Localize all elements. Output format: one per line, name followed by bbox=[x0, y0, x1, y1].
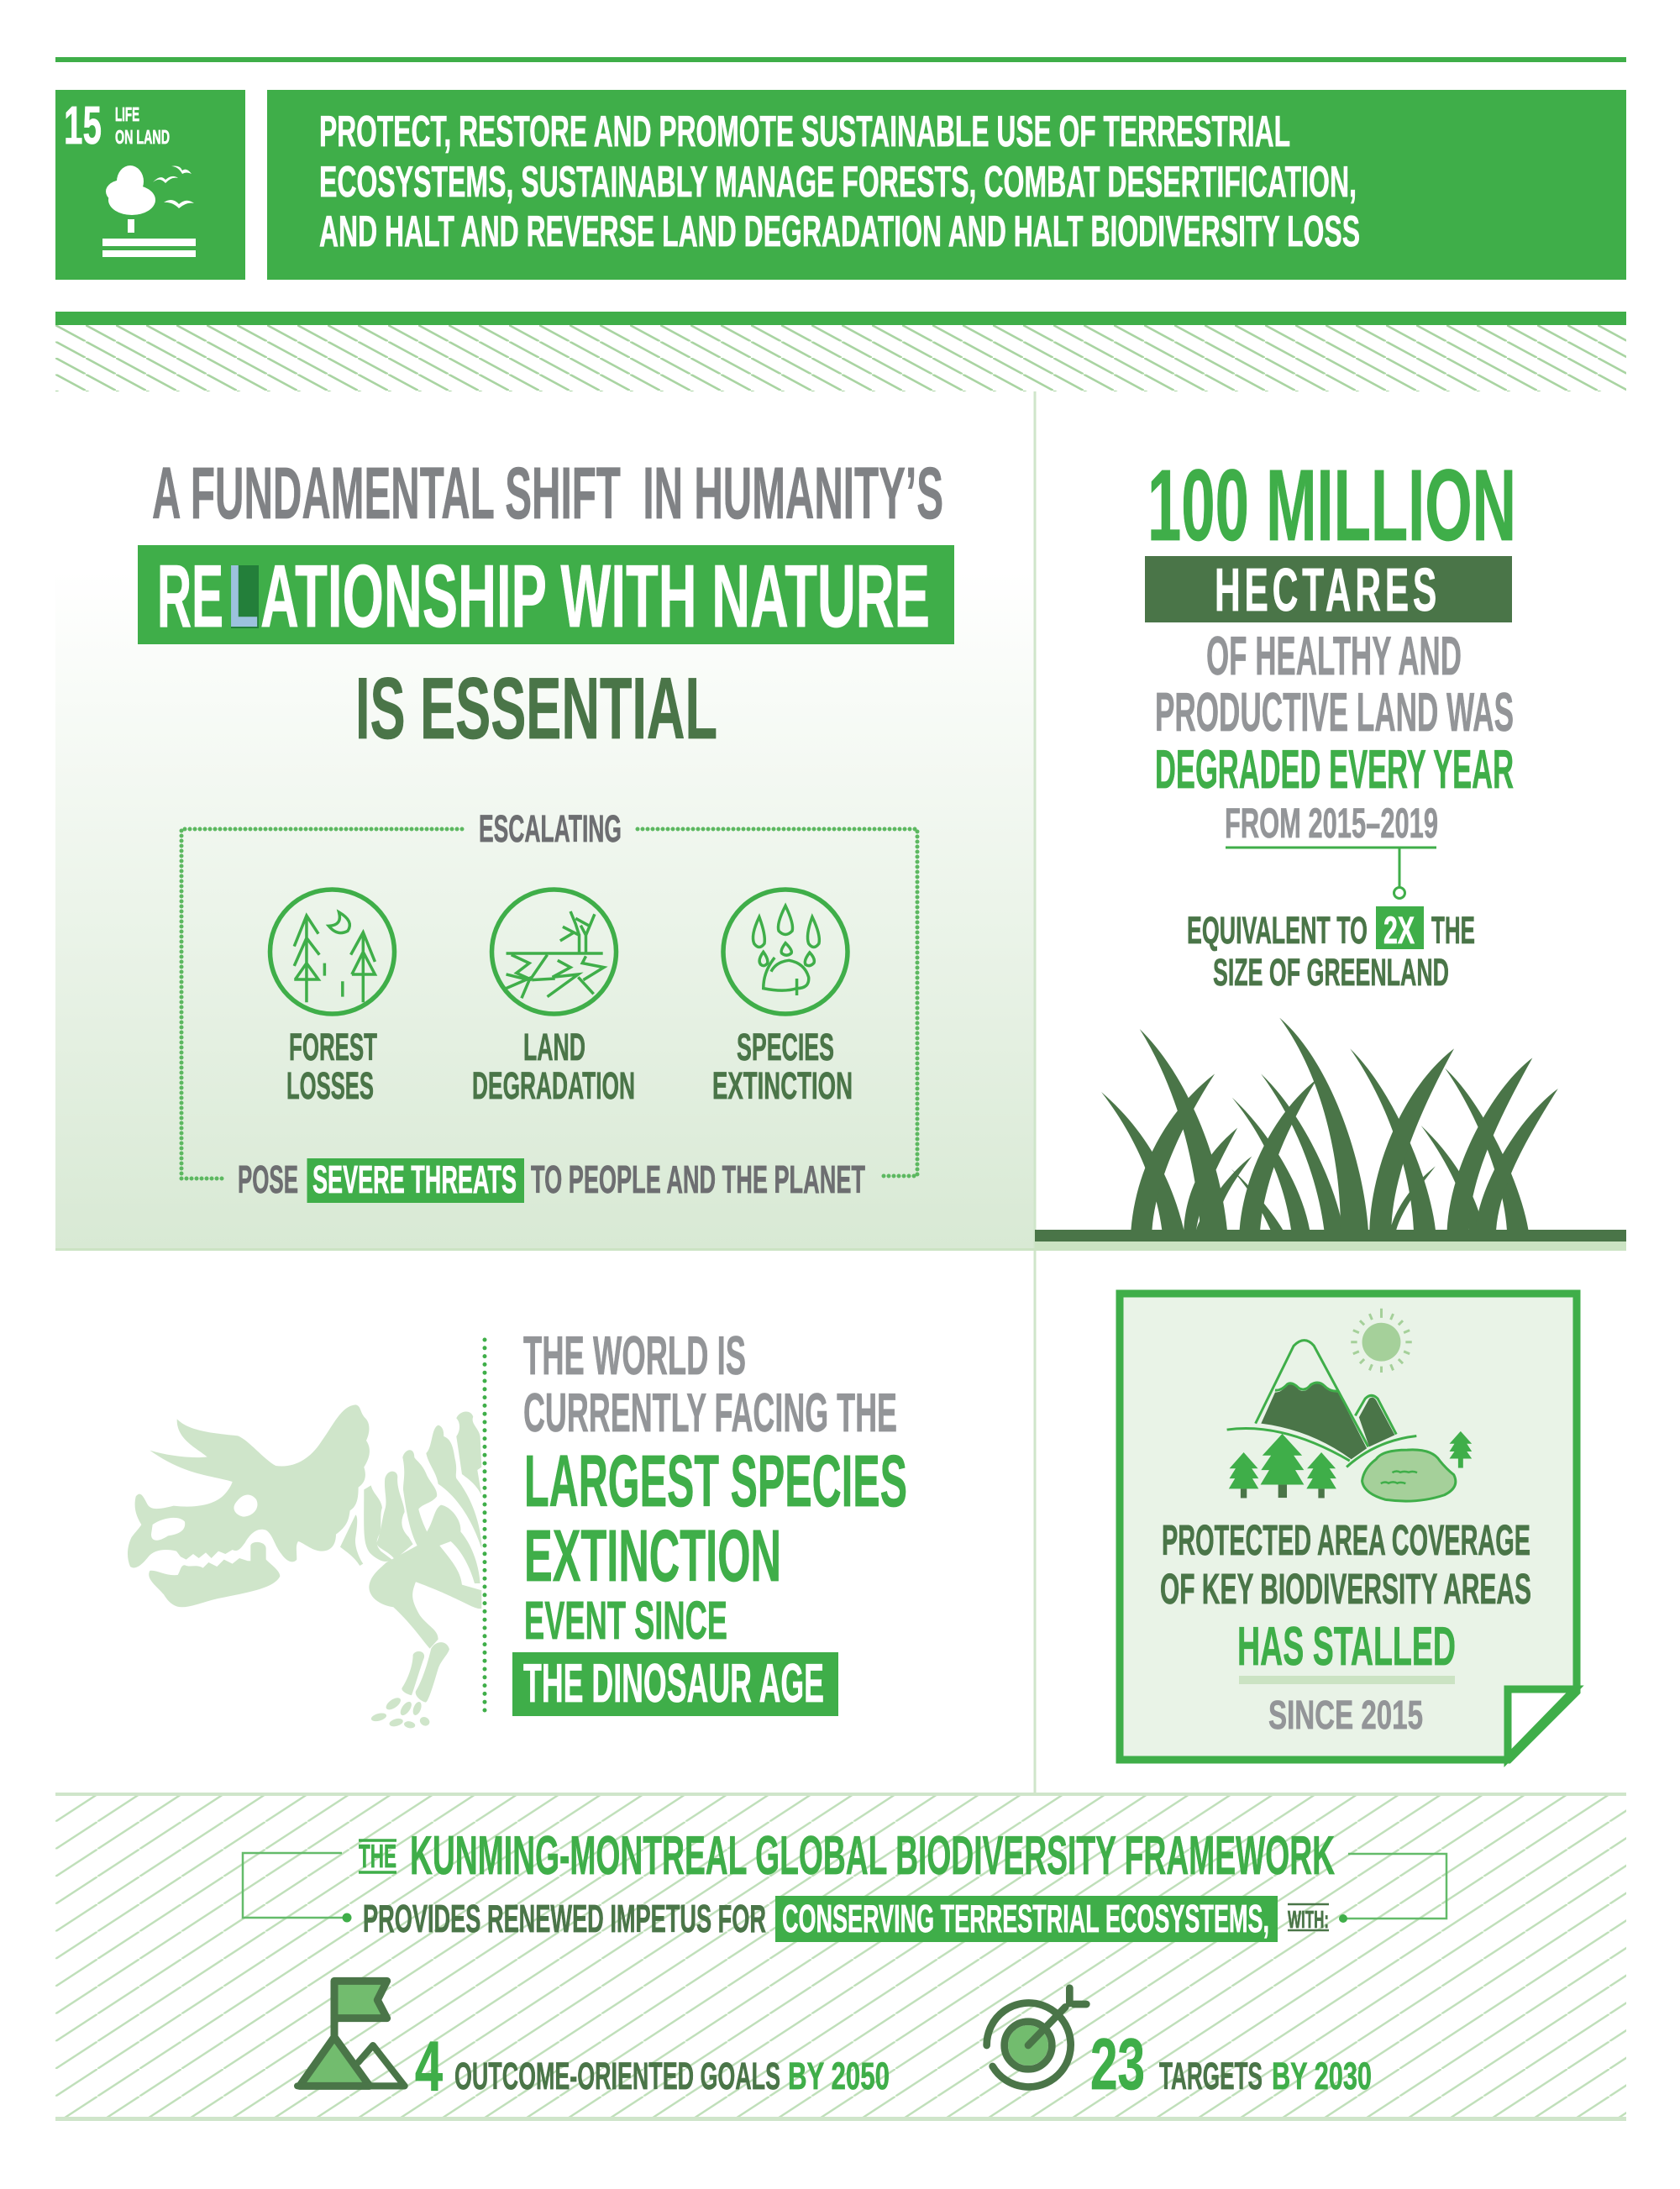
targets statistic bbox=[1090, 2024, 1372, 2105]
highlight bar: RE bbox=[157, 547, 223, 646]
label: forest losses bbox=[286, 1026, 377, 1107]
folded corner bbox=[1508, 1689, 1575, 1758]
icon: triceratops skeleton bbox=[128, 1404, 481, 1729]
icon: degraded land bbox=[492, 890, 617, 1014]
note text: HAS STALLED bbox=[1237, 1615, 1456, 1677]
panel: species extinction text: THE WORLD IS bbox=[523, 1325, 746, 1386]
label: land degradation: LAND bbox=[523, 1026, 585, 1068]
icon: animal paw bbox=[723, 890, 848, 1014]
goals statistic: 4 bbox=[415, 2027, 443, 2106]
label: species extinction: EXTINCTION bbox=[712, 1064, 853, 1107]
targets statistic: TARGETS bbox=[1159, 2055, 1263, 2097]
hectares bar: HECTARES bbox=[1215, 557, 1441, 624]
goals statistic: OUTCOME-ORIENTED GOALS bbox=[454, 2055, 780, 2097]
heading: relationship with nature: A FUNDAMENTAL SHIFT IN HUMANITY’S bbox=[152, 453, 943, 534]
panel: Kunming-Montreal framework bbox=[55, 1793, 1626, 2121]
dinosaur age highlight bbox=[512, 1652, 838, 1716]
panel: species extinction text: EXTINCTION bbox=[524, 1515, 781, 1597]
highlight bar bbox=[138, 545, 954, 646]
hectares bar bbox=[1145, 556, 1512, 624]
panel: land degradation statistic bbox=[1145, 448, 1516, 994]
framework subtitle: CONSERVING TERRESTRIAL ECOSYSTEMS, bbox=[782, 1897, 1269, 1940]
panel: species extinction text: EVENT SINCE bbox=[524, 1590, 727, 1651]
greenland comparison: EQUIVALENT TO bbox=[1187, 909, 1368, 952]
panel: protected areas note bbox=[1120, 1294, 1577, 1760]
dotted divider bbox=[482, 1340, 487, 1718]
label: species extinction: SPECIES bbox=[737, 1026, 834, 1068]
framework subtitle: WITH: bbox=[1288, 1907, 1329, 1934]
threats caption: SEVERE THREATS bbox=[312, 1157, 517, 1201]
highlight bar: ATIONSHIP WITH NATURE bbox=[260, 547, 930, 646]
goal name: LIFE bbox=[115, 103, 139, 125]
greenland comparison: 2X bbox=[1383, 909, 1415, 952]
goal number: 15 bbox=[64, 95, 102, 155]
goal statement banner bbox=[267, 90, 1626, 280]
panel: escalating threats frame bbox=[181, 807, 917, 1203]
goal name bbox=[115, 103, 170, 148]
highlight bar: L bbox=[228, 547, 259, 646]
targets statistic: 23 bbox=[1090, 2024, 1145, 2105]
threats caption: POSE bbox=[238, 1157, 298, 1201]
framework title: THE bbox=[359, 1839, 396, 1875]
note text bbox=[1160, 1516, 1531, 1738]
panel: species extinction text: CURRENTLY FACING THE bbox=[523, 1382, 897, 1443]
heading: relationship with nature: IS ESSENTIAL bbox=[355, 660, 717, 758]
label: forest losses: LOSSES bbox=[286, 1064, 374, 1107]
heading: relationship with nature bbox=[138, 453, 954, 758]
goals statistic: BY 2050 bbox=[788, 2055, 890, 2097]
threats caption: TO PEOPLE AND THE PLANET bbox=[531, 1157, 865, 1201]
label: land degradation bbox=[472, 1026, 635, 1107]
escalating label: ESCALATING bbox=[479, 807, 622, 850]
greenland comparison bbox=[1187, 906, 1475, 994]
panel: species extinction text bbox=[512, 1325, 907, 1716]
date range: FROM 2015–2019 bbox=[1225, 800, 1438, 847]
label: species extinction bbox=[712, 1026, 853, 1107]
icon: flag on mountain bbox=[297, 1981, 405, 2086]
statistic description: OF HEALTHY AND bbox=[1206, 625, 1462, 686]
goal badge bbox=[55, 90, 245, 280]
goals statistic bbox=[415, 2027, 890, 2106]
threats caption bbox=[238, 1157, 865, 1203]
goal name: ON LAND bbox=[115, 126, 170, 148]
panel: species extinction text: LARGEST SPECIES bbox=[524, 1441, 907, 1522]
icon: grass bbox=[1035, 1018, 1626, 1251]
statistic description bbox=[1155, 625, 1514, 800]
panel: fundamental shift background bbox=[55, 571, 1035, 1251]
greenland comparison: THE bbox=[1431, 909, 1475, 952]
bracket connector bbox=[243, 1853, 1446, 1923]
top rule bbox=[55, 57, 1626, 62]
greenland comparison: SIZE OF GREENLAND bbox=[1213, 951, 1449, 994]
icon: mountain landscape bbox=[1227, 1309, 1472, 1501]
framework subtitle: PROVIDES RENEWED IMPETUS FOR bbox=[363, 1897, 766, 1940]
targets statistic: BY 2030 bbox=[1272, 2055, 1372, 2097]
icon: forest bbox=[270, 890, 395, 1014]
framework title bbox=[359, 1824, 1335, 1886]
icon: target and dart bbox=[987, 1988, 1086, 2087]
connector bbox=[1226, 848, 1436, 899]
header band with hatching bbox=[55, 312, 1626, 391]
label: land degradation: DEGRADATION bbox=[472, 1064, 635, 1107]
note text: SINCE 2015 bbox=[1268, 1693, 1423, 1738]
label: forest losses: FOREST bbox=[289, 1026, 377, 1068]
framework subtitle bbox=[363, 1896, 1329, 1942]
icon: tree and birds bbox=[102, 165, 196, 257]
dinosaur age highlight: THE DINOSAUR AGE bbox=[523, 1652, 824, 1714]
